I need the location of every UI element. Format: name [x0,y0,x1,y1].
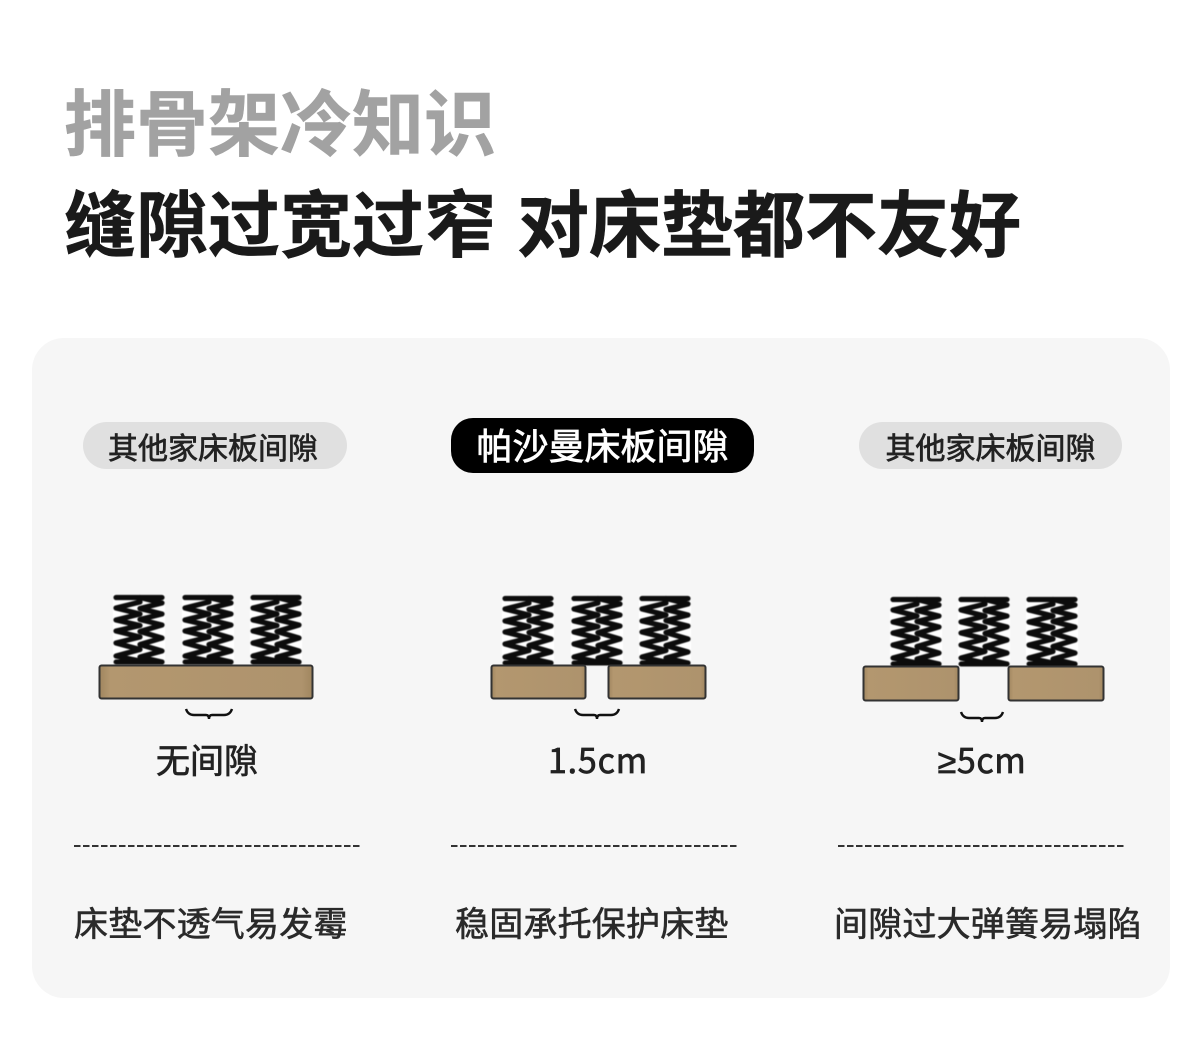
diagram: 1.5cm gap [492,595,706,719]
caption: left: 床垫不透气易发霉 [74,897,348,946]
title: grey heading: 排骨架冷知识 [64,66,496,171]
caption: middle: 稳固承托保护床垫 [455,897,729,946]
gap label: none: 无间隙 [156,734,258,783]
panel: comparison background [32,338,1170,998]
label pill: other brands right: 其他家床板间隙 [886,424,1096,468]
gap label: 5cm: ≥5cm [938,734,1026,783]
caption: right: 间隙过大弹簧易塌陷 [834,897,1142,946]
label pill: other brands left: 其他家床板间隙 [108,424,318,468]
diagram: no gap [100,594,312,719]
gap label: 1.5cm: 1.5cm [548,734,648,783]
diagram: 5cm gap [864,596,1104,722]
title: black heading: 缝隙过宽过窄 对床垫都不友好 [64,167,1021,272]
label pill: Pashaman: 帕沙曼床板间隙 [476,418,728,470]
